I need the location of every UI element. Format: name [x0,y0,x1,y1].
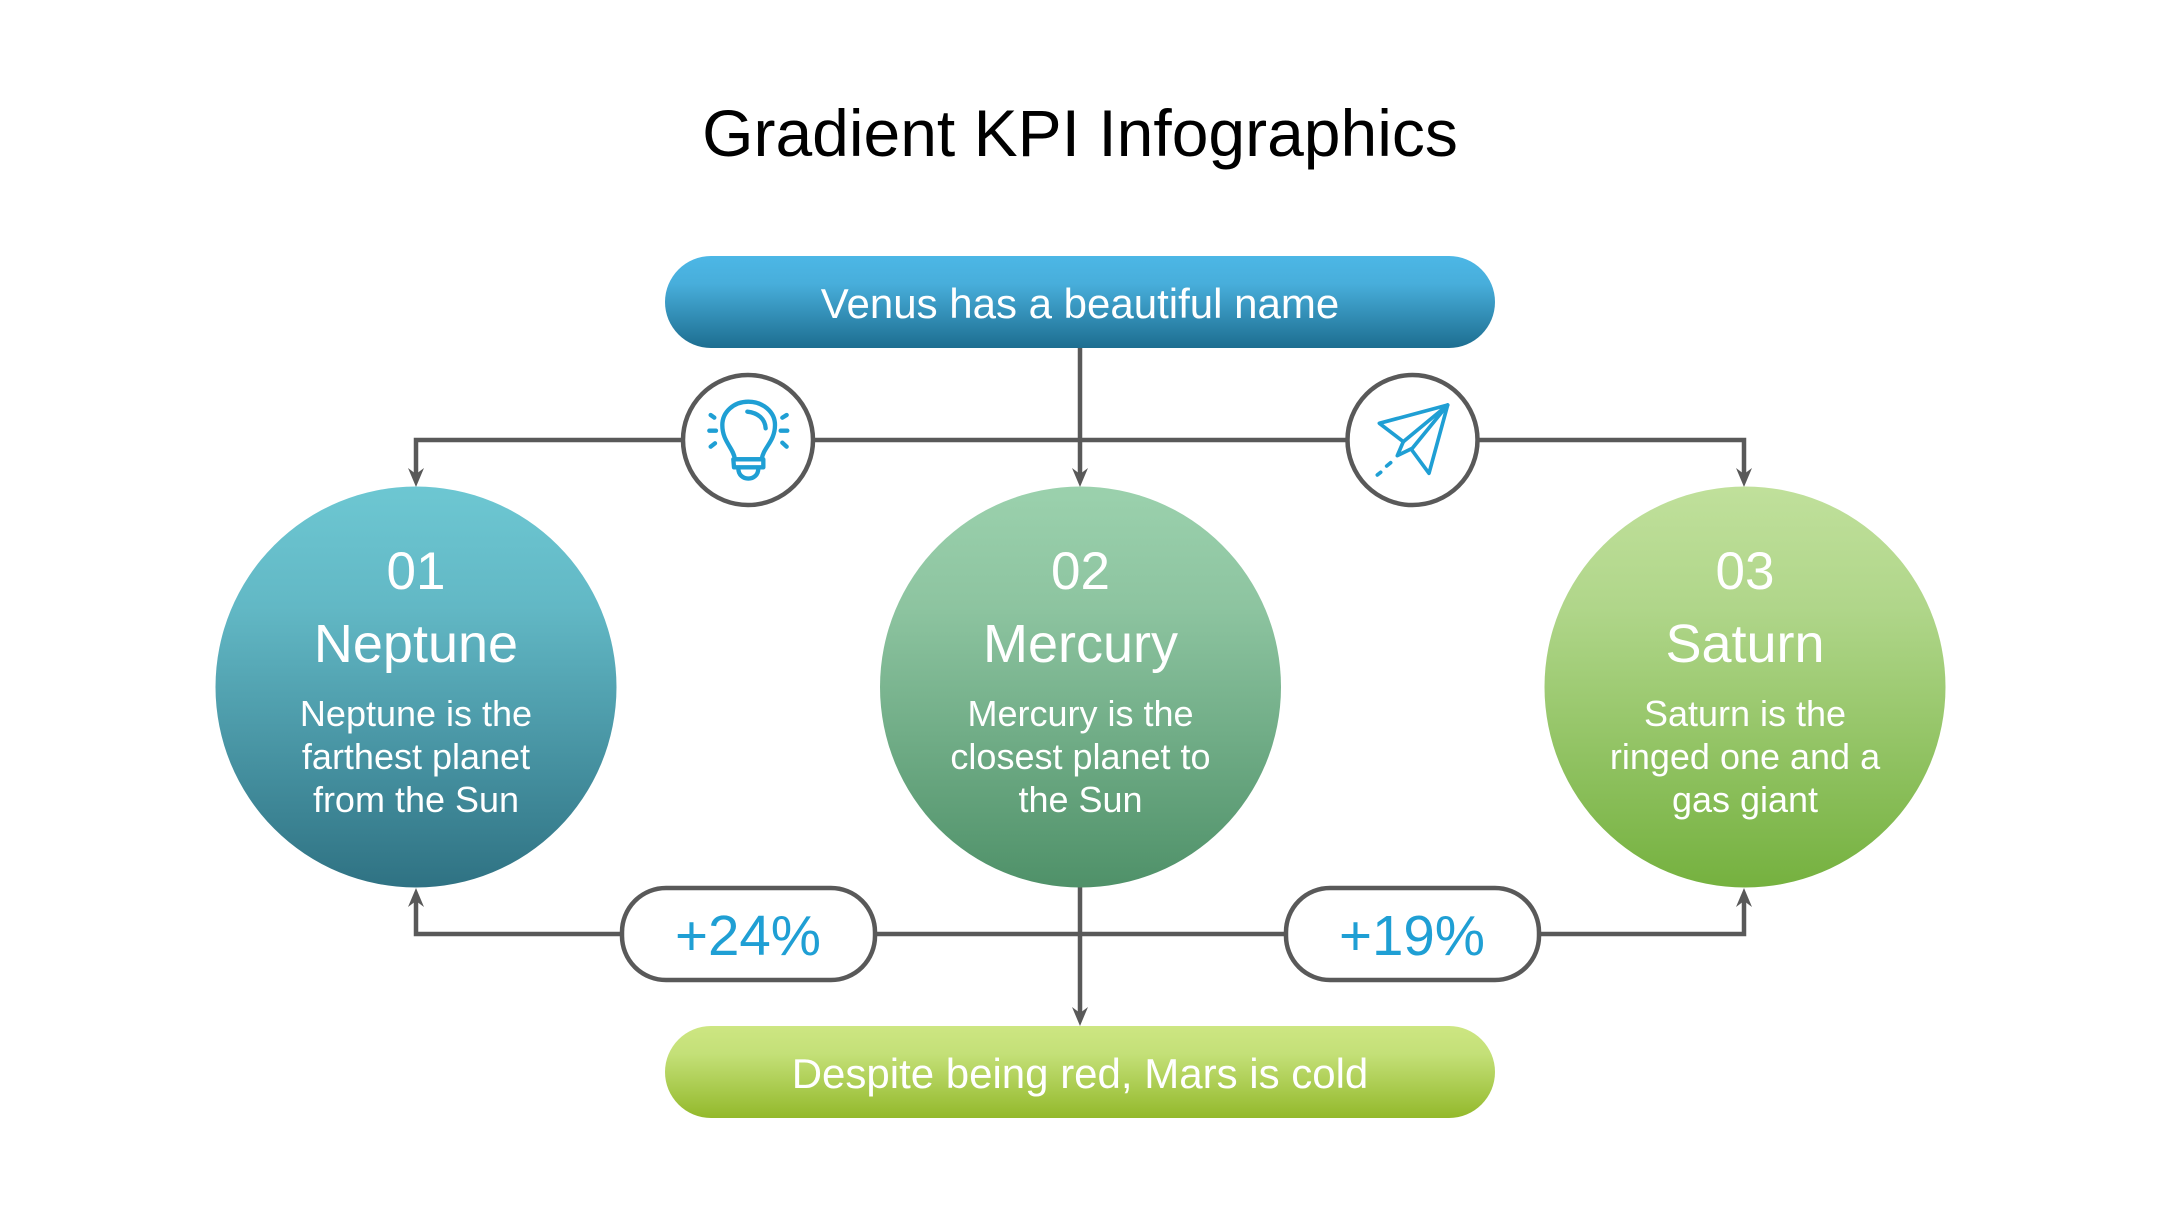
header pill: Venus [665,256,1495,348]
panel: Mercury: closest planet to [950,736,1211,777]
panel: Saturn: Saturn is the [1644,693,1846,734]
panel: Saturn [1544,486,1946,888]
panel: Neptune: from the Sun [313,779,519,820]
connectors: bottom [408,887,1752,1026]
header pill: Venus: Venus has a beautiful name [821,280,1339,327]
panel: Mercury: Mercury is the [967,693,1194,734]
panel: Neptune: Neptune is the [300,693,532,734]
panel: Neptune [216,486,616,888]
panel: Neptune: farthest planet [302,736,530,777]
footer pill: Mars: Despite being red, Mars is cold [792,1050,1368,1097]
title: Gradient KPI Infographics [702,96,1458,170]
KPI pill: +24% [622,888,875,980]
panel: Saturn: ringed one and a [1610,736,1881,777]
panel: Neptune: Neptune [314,614,518,674]
panel: Saturn: Saturn [1665,614,1825,674]
connectors: top [408,348,1752,487]
panel: Saturn: gas giant [1672,779,1818,820]
panel: Mercury [880,486,1281,888]
panel: Neptune: 01 [387,542,445,601]
panel: Mercury: the Sun [1018,779,1143,820]
panel: Mercury: 02 [1051,542,1110,601]
panel: Mercury: Mercury [983,614,1178,674]
icon: light bulb [683,375,813,505]
footer pill: Mars [665,1026,1495,1118]
KPI pill: +19%: +19% [1339,904,1485,967]
KPI pill: +24%: +24% [675,904,821,967]
icon: paper plane [1348,375,1478,505]
KPI pill: +19% [1286,888,1539,980]
panel: Saturn: 03 [1716,542,1774,601]
